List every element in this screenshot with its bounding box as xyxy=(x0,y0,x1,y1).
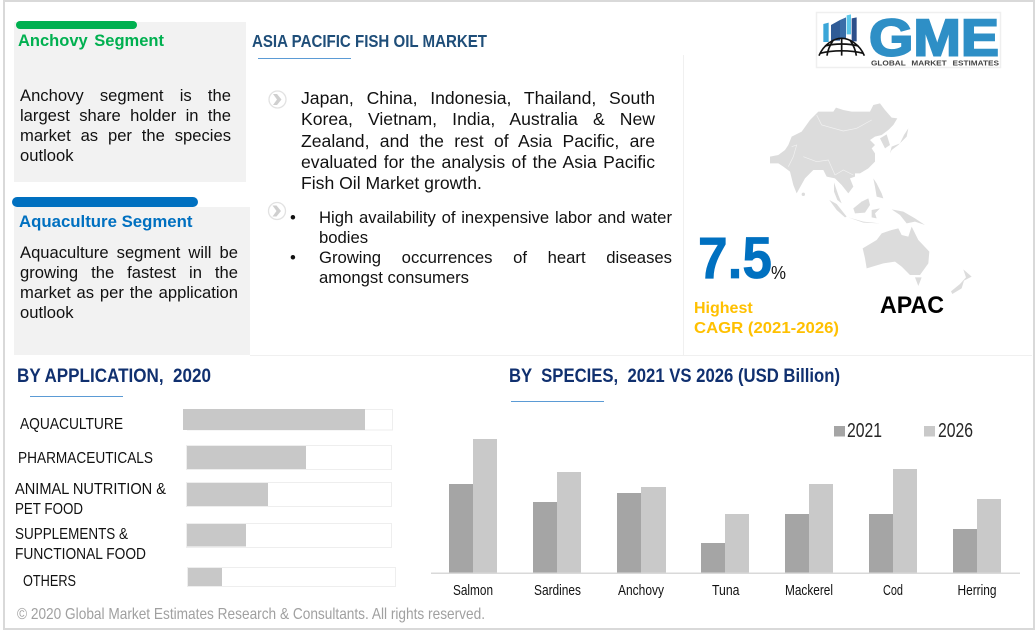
columns: herring xyxy=(953,499,1001,599)
bullet marker one: • xyxy=(290,208,296,227)
heading: anchovy segment: Anchovy Segment xyxy=(18,32,164,50)
text: countries paragraph xyxy=(301,88,655,193)
text: anchovy description: Anchovy segment is the xyxy=(20,86,231,105)
columns: tuna xyxy=(701,514,749,599)
columns: anchovy xyxy=(617,487,666,599)
stat: 7.5 percent cagr: 7.5 xyxy=(698,226,772,291)
bar: supplements and functional food xyxy=(15,524,392,563)
legend: 2021 xyxy=(847,420,882,442)
columns: salmon xyxy=(449,439,497,599)
columns: cod xyxy=(869,469,917,599)
columns: mackerel xyxy=(785,484,833,599)
text: countries paragraph: Zealand, and the rest of Asia Pacific, are xyxy=(301,131,655,151)
bar: supplements and functional food: FUNCTIONAL FOOD xyxy=(15,546,146,563)
logo wordmark: GME xyxy=(869,10,999,68)
bullet text two xyxy=(319,248,672,287)
bullet text one: bodies xyxy=(319,228,368,247)
bar: animal nutrition and pet food: ANIMAL NUTRITION & xyxy=(15,481,167,498)
columns: salmon: Salmon xyxy=(453,582,493,599)
text: aquaculture description: outlook xyxy=(20,303,74,322)
axis baseline xyxy=(431,572,1020,574)
text: countries paragraph: Japan, China, Indonesia, Thailand, South xyxy=(301,88,655,108)
heading: by species: BY SPECIES, 2021 VS 2026 (USD Billion) xyxy=(509,366,840,387)
columns: tuna: Tuna xyxy=(712,582,740,599)
panel: anchovy segment xyxy=(14,21,246,182)
panel background xyxy=(14,207,250,355)
chart: horizontal bars by application xyxy=(15,409,396,590)
bullet text two: Growing occurrences of heart diseases xyxy=(319,248,672,267)
chart: grouped columns by species xyxy=(431,420,1020,599)
map: islands and oceania xyxy=(829,198,972,294)
accent bar: green xyxy=(16,21,137,29)
divider lines xyxy=(250,55,1032,356)
text: countries paragraph: Fish Oil Market growth. xyxy=(301,173,482,193)
icon: chevron bullet one xyxy=(269,91,286,108)
bar: others xyxy=(23,568,396,590)
bar: pharmaceuticals: PHARMACEUTICALS xyxy=(18,450,153,467)
bar: aquaculture: AQUACULTURE xyxy=(20,416,123,433)
map label: apac: APAC xyxy=(880,292,944,319)
bullet text one xyxy=(319,208,672,247)
legend xyxy=(834,420,973,442)
bullet marker two: • xyxy=(290,248,296,267)
text: aquaculture description: growing the fastest in the xyxy=(20,263,238,282)
stat: 7.5 percent cagr: % xyxy=(771,263,786,283)
bar: animal nutrition and pet food xyxy=(15,481,392,518)
stat caption: highest cagr: CAGR (2021-2026) xyxy=(694,320,839,337)
columns: anchovy: Anchovy xyxy=(618,582,664,599)
columns: cod: Cod xyxy=(883,582,903,599)
text: aquaculture description: market as per the application xyxy=(20,283,238,302)
columns: sardines xyxy=(533,472,581,599)
heading: asia pacific fish oil market: ASIA PACIFIC FISH OIL MARKET xyxy=(252,31,487,51)
logo icon: bars and globe xyxy=(819,14,864,56)
bar: others: OTHERS xyxy=(23,573,76,590)
columns: sardines: Sardines xyxy=(534,582,581,599)
text: anchovy description: largest share holder in the xyxy=(20,106,231,125)
text: anchovy description: market as per the species xyxy=(20,126,231,145)
panel background xyxy=(14,22,246,182)
bar: aquaculture xyxy=(20,409,392,433)
stat caption: highest cagr: Highest xyxy=(694,300,753,317)
text: countries paragraph: Korea, Vietnam, India, Australia & New xyxy=(301,109,655,129)
columns: mackerel: Mackerel xyxy=(785,582,833,599)
bar: animal nutrition and pet food: PET FOOD xyxy=(15,501,83,518)
text: aquaculture description: Aquaculture segment will be xyxy=(20,243,238,262)
panel: aquaculture segment xyxy=(12,197,250,355)
accent bar: blue xyxy=(12,197,198,207)
legend: 2026 xyxy=(938,420,973,442)
columns: herring: Herring xyxy=(958,582,996,599)
map: mainland asia xyxy=(770,103,908,203)
text: anchovy description: outlook xyxy=(20,146,74,165)
icon: chevron bullet two xyxy=(268,202,286,220)
text: aquaculture description xyxy=(20,243,238,322)
bar: pharmaceuticals xyxy=(18,446,392,470)
text: growth driver bullets xyxy=(290,208,672,287)
bullet text one: High availability of inexpensive labor and water xyxy=(319,208,672,227)
bullet text two: amongst consumers xyxy=(319,268,469,287)
text: anchovy description xyxy=(20,86,231,165)
logo tagline: GLOBAL MARKET ESTIMATES xyxy=(871,60,999,68)
heading: aquaculture segment: Aquaculture Segment xyxy=(19,212,192,231)
stat caption: highest cagr xyxy=(694,300,839,337)
text: countries paragraph: evaluated for the analysis of the Asia Pacific xyxy=(301,152,655,172)
logo: global market estimates xyxy=(816,10,1000,68)
bar: supplements and functional food: SUPPLEMENTS & xyxy=(15,526,129,543)
heading: by application: BY APPLICATION, 2020 xyxy=(17,366,211,387)
footer: copyright: © 2020 Global Market Estimates Research & Consultants. All rights reserved. xyxy=(17,606,485,623)
map: asia pacific region xyxy=(770,103,972,294)
